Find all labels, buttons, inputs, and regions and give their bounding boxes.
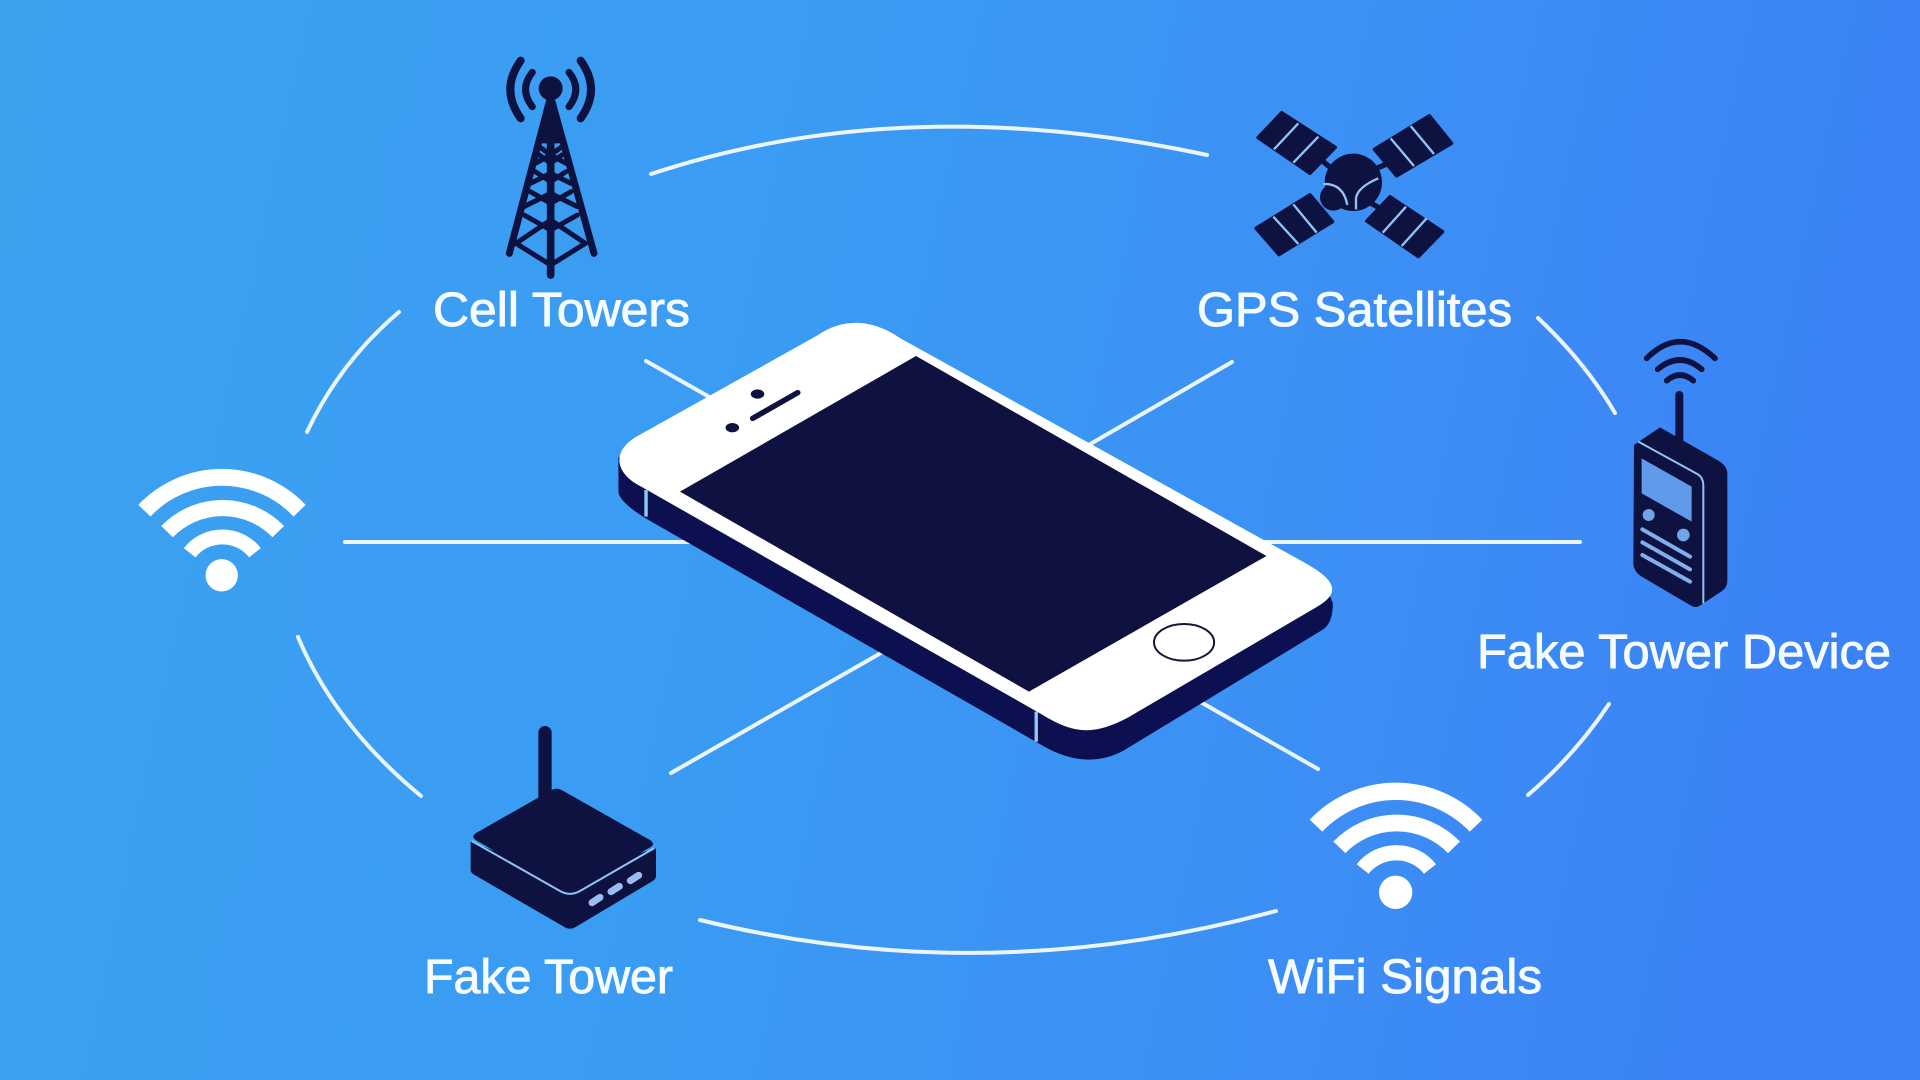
label: WiFi Signals: WiFi Signals bbox=[1268, 951, 1542, 1004]
phone speaker and camera bbox=[726, 389, 798, 432]
icon: router fake tower bbox=[471, 733, 656, 929]
WiFi signals source bbox=[1268, 791, 1542, 1004]
icon: handheld fake tower device bbox=[1633, 342, 1727, 607]
icon: wifi bbox=[1316, 791, 1476, 909]
phone side highlights bbox=[646, 490, 1036, 742]
phone home button bbox=[1154, 624, 1214, 661]
central smartphone bbox=[618, 323, 1333, 760]
cell tower source bbox=[433, 61, 690, 337]
phone screen bbox=[680, 356, 1266, 692]
GPS satellite source bbox=[1197, 113, 1512, 337]
phone front face bbox=[619, 323, 1332, 730]
left WiFi icon bbox=[144, 477, 300, 591]
spokes from phone to sources bbox=[345, 361, 1580, 773]
icon: satellite bbox=[1256, 113, 1452, 257]
phone side body bbox=[618, 457, 1333, 760]
label: GPS Satellites: GPS Satellites bbox=[1197, 284, 1512, 337]
connection ring arcs bbox=[298, 127, 1615, 953]
label: Fake Tower: Fake Tower bbox=[424, 951, 673, 1004]
label: Cell Towers: Cell Towers bbox=[433, 284, 690, 337]
label: Fake Tower Device: Fake Tower Device bbox=[1477, 626, 1891, 679]
icon: cell tower bbox=[509, 61, 594, 275]
icon: wifi bbox=[144, 477, 300, 591]
fake tower device source bbox=[1477, 342, 1891, 679]
fake tower router source bbox=[424, 733, 673, 1004]
